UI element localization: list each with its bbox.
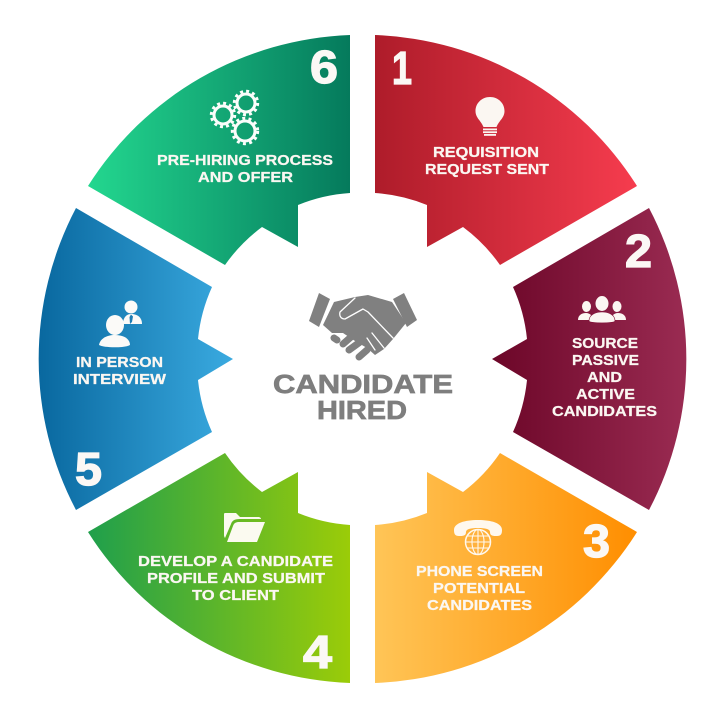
icon: lightbulb <box>476 97 504 136</box>
icon: gears <box>211 91 258 144</box>
number 2: 2 <box>625 225 652 277</box>
number 5: 5 <box>75 443 102 495</box>
icon: telephone with globe <box>454 520 502 554</box>
panel: step 6 pre-hiring process <box>88 35 350 265</box>
number 1: 1 <box>392 42 412 94</box>
icon: handshake <box>309 293 417 357</box>
icon: interview people <box>99 300 142 347</box>
label: source passive and active candidates: CANDIDATES <box>552 404 657 420</box>
panel: step 5 in person interview <box>39 208 233 510</box>
label: pre-hiring process and offer <box>157 153 333 186</box>
number 6: 6 <box>310 41 338 93</box>
label: pre-hiring process and offer: AND OFFER <box>198 170 294 186</box>
label: source passive and active candidates: ACTIVE <box>576 387 635 403</box>
panel: step 4 candidate profile <box>88 453 350 683</box>
center label: candidate hired: HIRED <box>317 395 407 425</box>
panel: step 3 phone screen <box>375 453 637 683</box>
label: in person interview: INTERVIEW <box>73 372 166 388</box>
label: develop a candidate profile and submit to client <box>138 554 333 604</box>
label: requisition request sent <box>425 145 549 178</box>
number 3: 3 <box>583 515 610 567</box>
label: phone screen potential candidates: CANDIDATES <box>427 598 532 614</box>
icon: group of people <box>578 296 626 323</box>
label: requisition request sent: REQUISITION <box>433 145 539 161</box>
label: phone screen potential candidates: PHONE SCREEN <box>416 564 543 580</box>
label: source passive and active candidates: PASSIVE <box>572 353 639 369</box>
panel: step 2 source candidates <box>492 208 686 510</box>
label: phone screen potential candidates: POTENTIAL <box>433 581 525 597</box>
icon: open folder <box>224 513 265 542</box>
label: in person interview <box>73 355 166 388</box>
label: source passive and active candidates: AND <box>587 370 622 386</box>
label: source passive and active candidates: SOURCE <box>572 336 638 352</box>
label: develop a candidate profile and submit to client: DEVELOP A CANDIDATE <box>138 554 333 570</box>
center label: candidate hired: CANDIDATE <box>273 369 453 399</box>
label: pre-hiring process and offer: PRE-HIRING PROCESS <box>157 153 333 169</box>
label: in person interview: IN PERSON <box>76 355 163 371</box>
number 4: 4 <box>303 626 332 678</box>
label: requisition request sent: REQUEST SENT <box>425 162 549 178</box>
label: develop a candidate profile and submit to client: TO CLIENT <box>192 588 279 604</box>
label: develop a candidate profile and submit to client: PROFILE AND SUBMIT <box>147 571 325 587</box>
center label: candidate hired <box>273 369 453 425</box>
panel: step 1 requisition <box>375 35 637 265</box>
label: source passive and active candidates <box>552 336 657 420</box>
label: phone screen potential candidates <box>416 564 543 614</box>
